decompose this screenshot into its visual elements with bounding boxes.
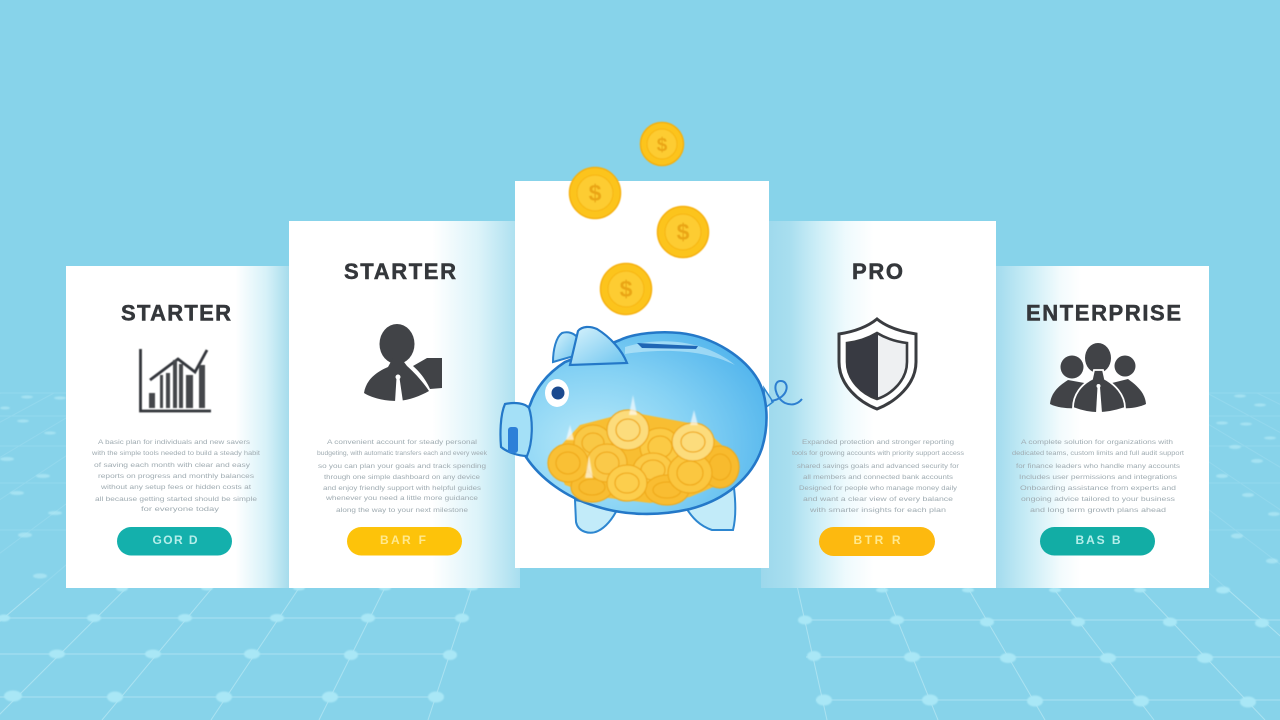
coin pile [548, 410, 739, 505]
text block: starter left description: reports on progress and monthly balances [98, 473, 255, 480]
text block: starter left description: without any setup fees or hidden costs at [100, 484, 251, 491]
text block: starter left description: A basic plan for individuals and new savers [98, 439, 251, 446]
tail [764, 381, 802, 408]
coin: right [658, 206, 708, 258]
panel: enterprise [996, 266, 1209, 588]
text block: starter second description: so you can plan your goals and track spending [318, 463, 486, 470]
haze over upper grid at right [1209, 390, 1280, 588]
legs [575, 488, 735, 533]
coin: upper left: $ [589, 180, 602, 206]
heading: pro: PRO [852, 259, 903, 284]
text block: pro description: with smarter insights for each plan [809, 507, 947, 514]
haze over upper grid at left [0, 390, 66, 588]
snout [500, 403, 532, 456]
button: starter left [117, 527, 232, 556]
grid nodes [0, 584, 1269, 708]
text block: enterprise description: Onboarding assistance from experts and [1020, 485, 1176, 492]
perspective grid floor left [0, 393, 536, 720]
back ear [553, 332, 578, 362]
eye [545, 379, 569, 407]
text block: starter second description: along the way to your next milestone [336, 507, 468, 514]
text block: starter second description: and enjoy friendly support with helpful guides [323, 485, 482, 492]
icon: team of three people [1050, 343, 1146, 413]
text block: starter second description: A convenient account for steady personal [327, 439, 478, 446]
text block: starter second description: whenever you need a little more guidance [325, 495, 478, 502]
sparkles on coins [566, 395, 698, 478]
button: enterprise [1040, 527, 1155, 556]
text block: enterprise description [1012, 439, 1184, 514]
text block: enterprise description: dedicated teams, custom limits and full audit support [1012, 450, 1184, 457]
icon: person with card [364, 324, 442, 402]
heading: enterprise: ENTERPRISE [1026, 300, 1181, 326]
panel: center card [515, 181, 769, 568]
text block: enterprise description: A complete solution for organizations with [1021, 439, 1173, 446]
front ear [570, 327, 627, 365]
button: enterprise: BAS B [1076, 533, 1121, 547]
text block: pro description: Expanded protection and stronger reporting [802, 439, 954, 446]
text block: enterprise description: for finance leaders who handle many accounts [1016, 463, 1181, 470]
icon: bar and line chart [140, 349, 211, 411]
panel: pro [761, 221, 996, 588]
button: pro: BTR R [854, 533, 901, 547]
button: pro [819, 527, 935, 556]
button: starter second [347, 527, 462, 556]
text block: starter left description: of saving each month with clear and easy [94, 462, 251, 469]
coin: lower: $ [620, 276, 633, 302]
heading: starter second: STARTER [344, 259, 456, 284]
text block: pro description [792, 439, 965, 514]
glass highlight [625, 341, 735, 365]
coin: right: $ [677, 219, 690, 245]
text block: pro description: and want a clear view of every balance [803, 496, 954, 503]
text block: starter left description: all because getting started should be simple [95, 496, 257, 503]
upper grid dashes [0, 394, 1280, 578]
coin: upper left [570, 168, 620, 218]
icon: shield [839, 319, 916, 409]
coin: top: $ [657, 135, 668, 156]
button: starter second: BAR F [380, 533, 426, 547]
panel: starter second [289, 221, 520, 588]
panel: starter left [66, 266, 289, 588]
coin slot [637, 343, 698, 349]
text block: pro description: all members and connected bank accounts [803, 474, 954, 481]
body [520, 332, 767, 514]
text block: enterprise description: Includes user permissions and integrations [1019, 474, 1178, 481]
text block: enterprise description: ongoing advice tailored to your business [1021, 496, 1176, 503]
button: starter left: GOR D [152, 533, 198, 547]
text block: starter second description: through one simple dashboard on any device [324, 474, 480, 481]
heading: starter: STARTER [121, 300, 231, 326]
text block: starter left description: with the simple tools needed to build a steady habit [91, 450, 260, 457]
text block: starter second description [317, 439, 488, 514]
text block: enterprise description: and long term growth plans ahead [1030, 507, 1167, 514]
text block: starter second description: budgeting, with automatic transfers each and every week [317, 450, 488, 457]
text block: pro description: Designed for people who manage money daily [799, 485, 958, 492]
coin: top [640, 122, 684, 166]
text block: starter left description: for everyone today [141, 506, 220, 513]
coin: lower [600, 264, 652, 314]
illustration: glass piggy bank [500, 327, 802, 533]
text block: pro description: shared savings goals and advanced security for [797, 463, 960, 470]
text block: pro description: tools for growing accounts with priority support access [792, 450, 965, 457]
perspective grid floor right [754, 393, 1280, 720]
text block: starter left description [91, 439, 260, 513]
